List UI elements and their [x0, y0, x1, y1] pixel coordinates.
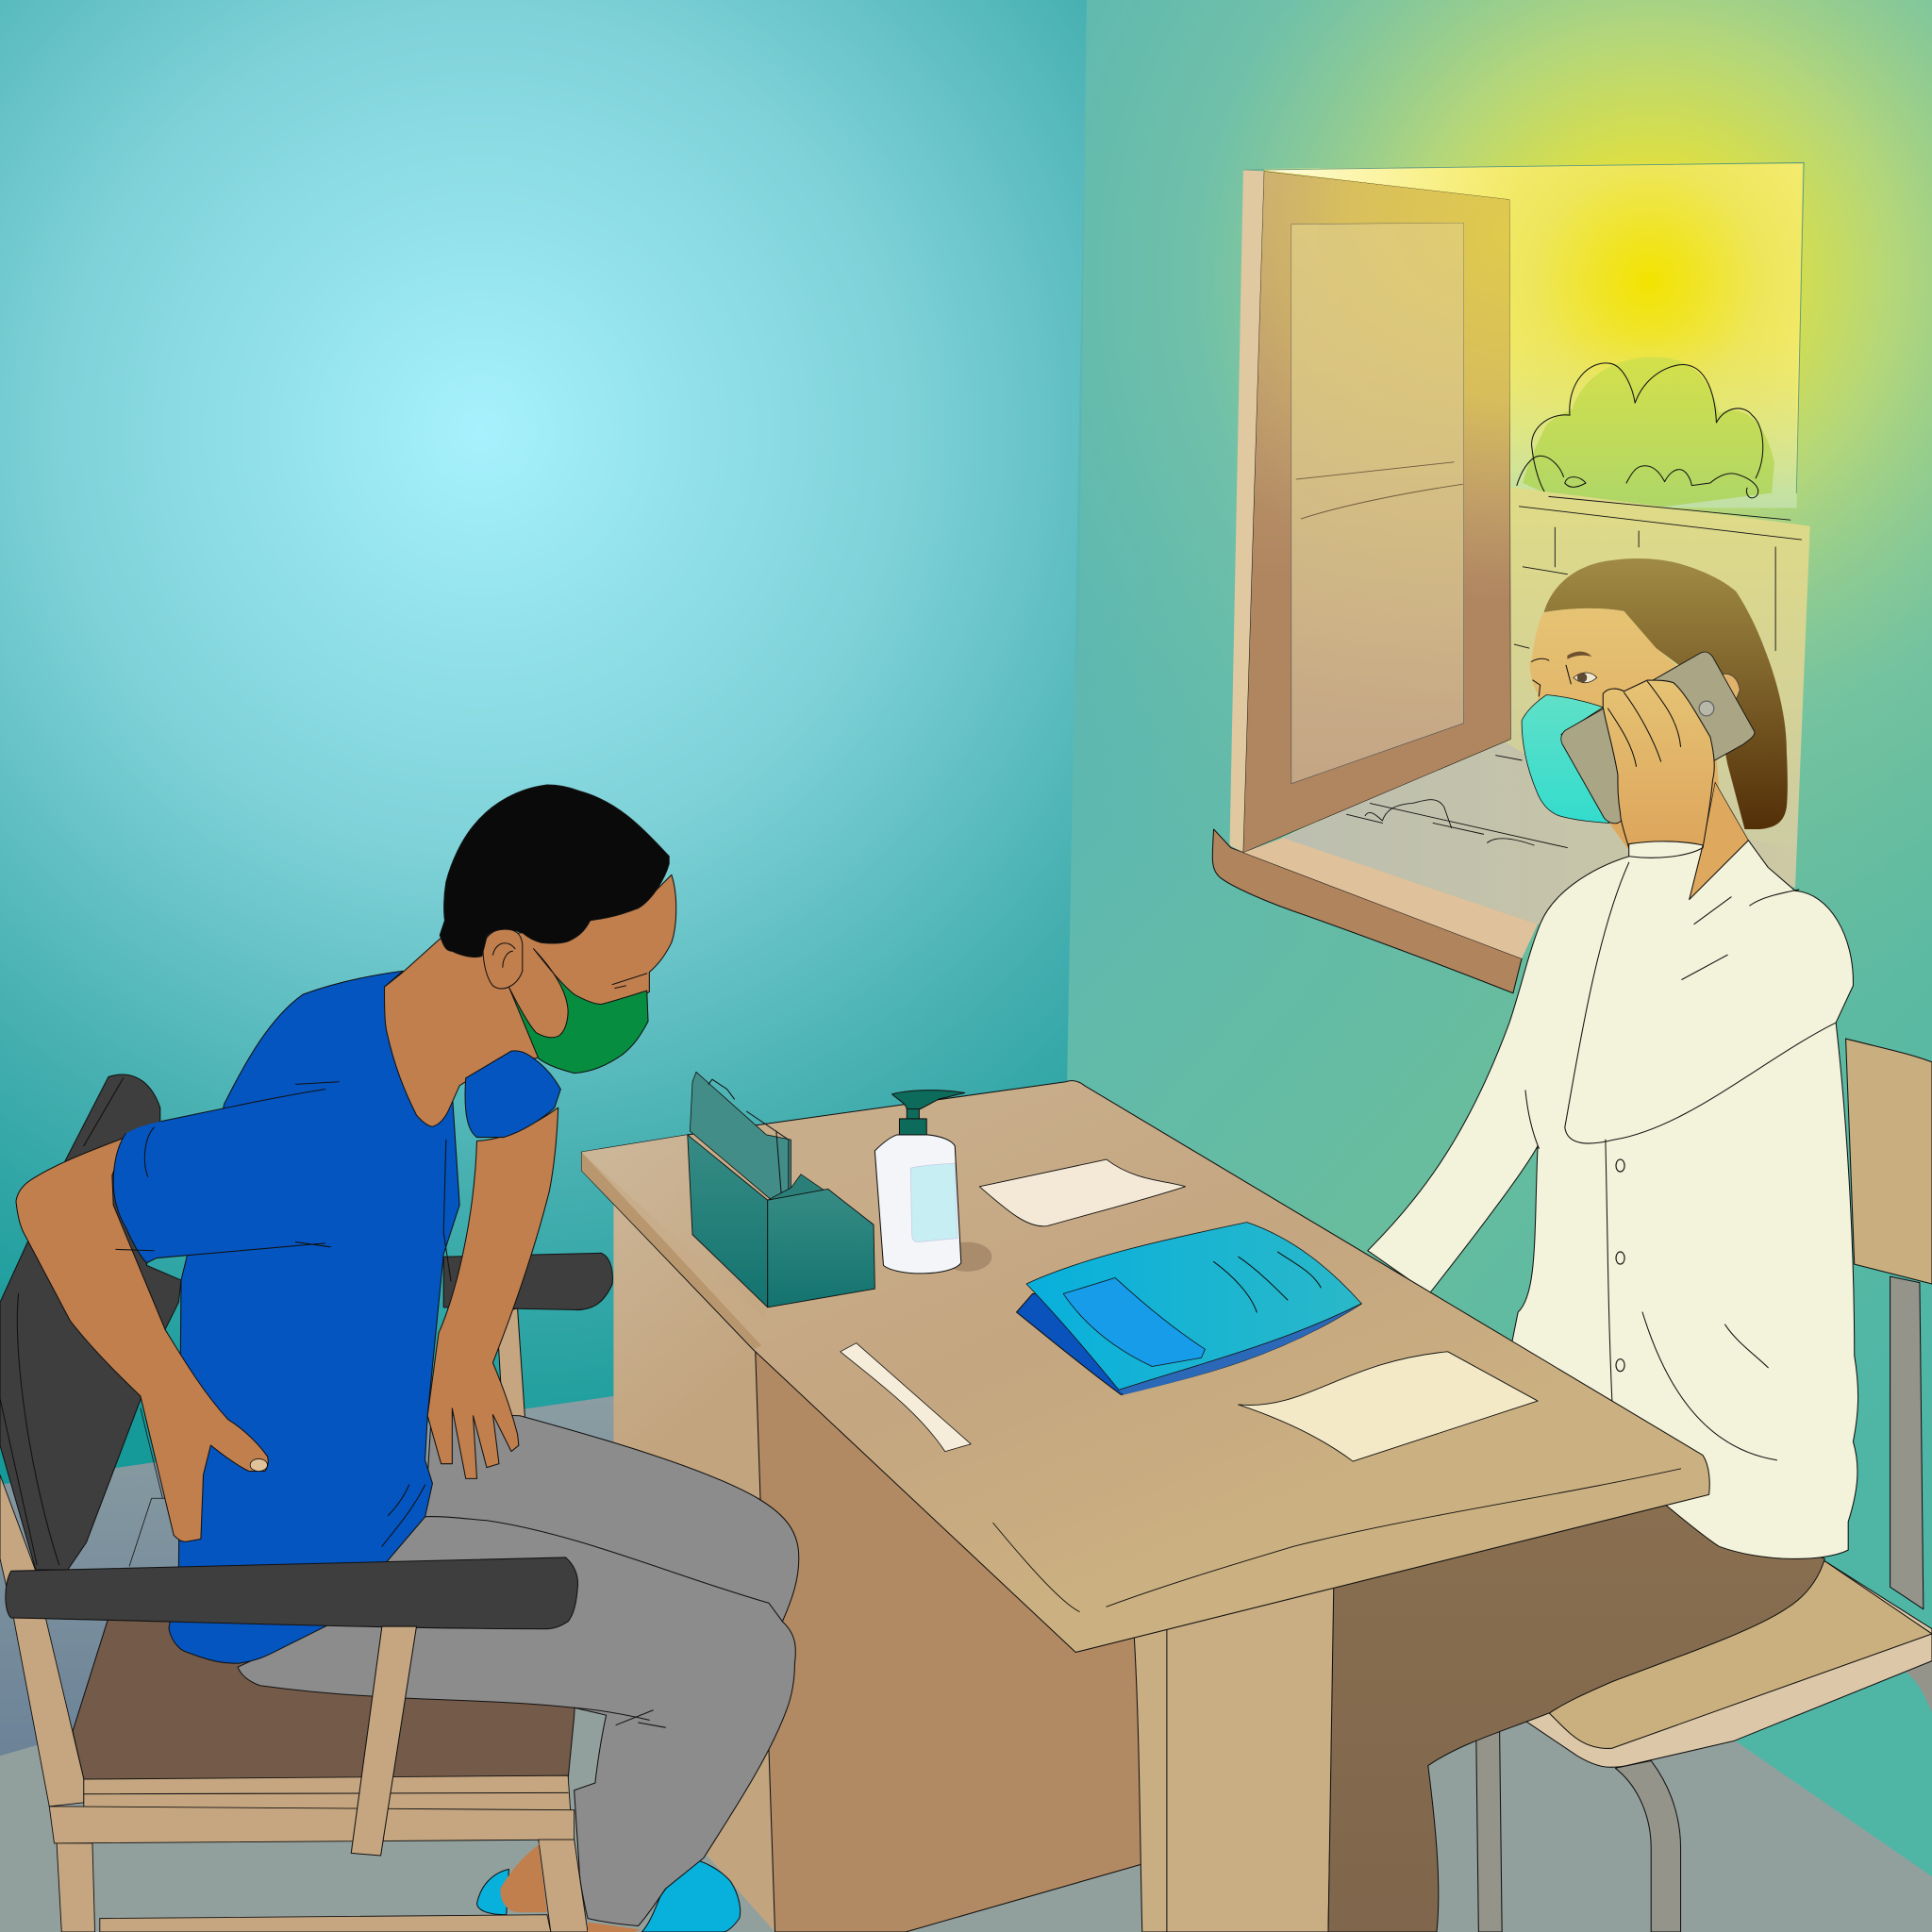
face — [1530, 608, 1719, 850]
paper strip — [841, 1343, 971, 1452]
shirt body — [169, 971, 459, 1663]
chair posts — [1890, 1276, 1924, 1609]
right arm — [427, 1108, 558, 1478]
shirt right sleeve — [465, 1051, 560, 1138]
chair seat — [1524, 1561, 1932, 1767]
chair seat — [73, 1618, 579, 1779]
blouse buttons — [1616, 1159, 1624, 1372]
shoes — [476, 1869, 508, 1915]
left wall — [0, 0, 1087, 1602]
phone — [1561, 652, 1755, 824]
sheet of paper, front — [1239, 1352, 1538, 1461]
doctor face mask — [1522, 695, 1609, 823]
outside ground — [1283, 740, 1792, 926]
neck — [1690, 782, 1748, 899]
desk base — [613, 1201, 1335, 1932]
patient hair — [440, 785, 669, 958]
hand sanitizer bottle — [874, 1091, 965, 1274]
left arm — [16, 1138, 268, 1541]
near armrest — [6, 1557, 578, 1629]
window — [1212, 162, 1810, 993]
doctor — [1328, 558, 1858, 1932]
desk right leg — [1134, 1577, 1335, 1932]
doctor hand — [1603, 680, 1714, 848]
patient chair rear — [0, 1074, 612, 1932]
window frame jamb — [1230, 170, 1264, 853]
bottle shadow — [942, 1242, 991, 1272]
sheet of paper, back — [979, 1159, 1185, 1226]
hair back — [1544, 558, 1788, 829]
trousers — [238, 1415, 799, 1925]
desk top — [581, 1072, 1709, 1653]
floor — [0, 1343, 1932, 1932]
patient — [6, 785, 799, 1932]
chair back — [1846, 1039, 1932, 1284]
open window shutter — [1243, 172, 1510, 853]
blue folder — [1017, 1223, 1361, 1395]
chair wire — [129, 1408, 165, 1566]
file organizer — [688, 1072, 874, 1307]
desk left panel — [613, 1201, 775, 1932]
window sill — [1212, 829, 1538, 993]
patient face mask — [508, 949, 648, 1074]
chair back cushion — [0, 1074, 181, 1570]
desk modesty panel — [756, 1349, 1146, 1932]
near chair post — [351, 1626, 416, 1856]
ear — [483, 929, 523, 989]
doctor chair — [1476, 1039, 1932, 1932]
bush — [1517, 357, 1774, 508]
chair frame — [0, 1474, 588, 1932]
eye and brow — [1532, 652, 1597, 696]
window opening sky — [1264, 164, 1803, 508]
neck and face — [385, 874, 676, 1126]
far armrest — [443, 1253, 612, 1310]
right wall — [1067, 0, 1932, 1885]
doctor blouse — [1368, 841, 1858, 1558]
outside wall — [1281, 486, 1810, 924]
far chair post — [496, 1308, 525, 1417]
trousers — [1328, 1454, 1824, 1932]
ear — [1720, 674, 1740, 712]
shirt left sleeve — [113, 1090, 333, 1263]
